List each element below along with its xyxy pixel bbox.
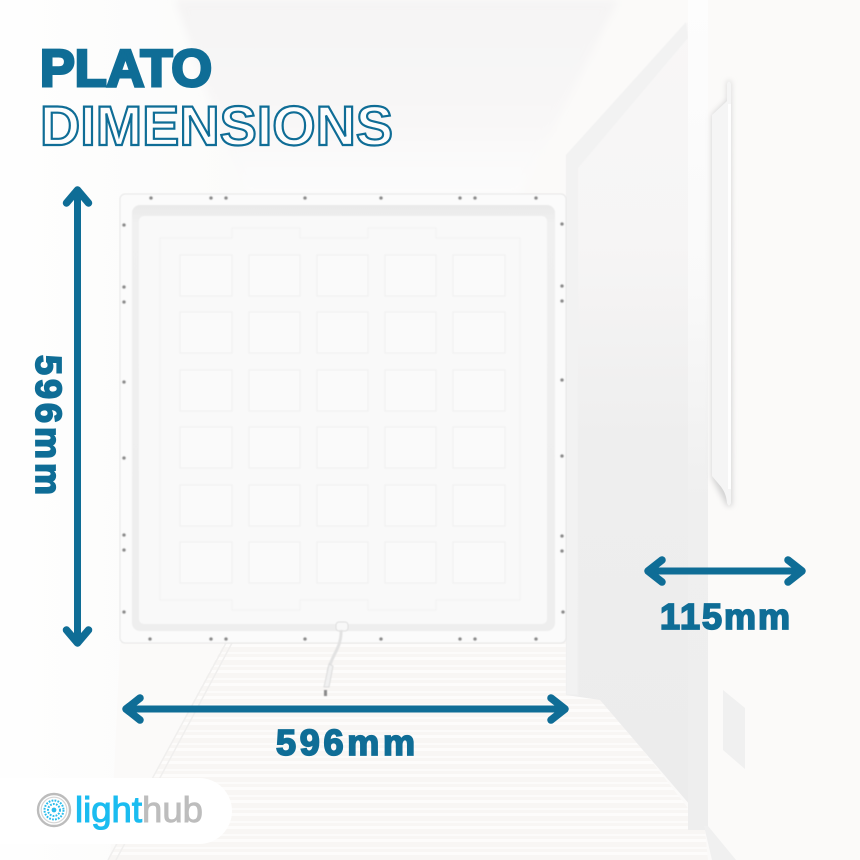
label: depth 115mm: 115mm	[660, 596, 790, 637]
power cable	[324, 622, 348, 696]
label: width 596mm: 596mm	[276, 722, 415, 763]
arrow: depth	[648, 560, 802, 582]
profile body	[712, 82, 731, 506]
arrow: horizontal width	[126, 698, 565, 720]
arrow: vertical height	[66, 190, 88, 643]
skirting	[704, 826, 736, 860]
profile highlight	[728, 104, 731, 489]
title line: PLATO: PLATO	[40, 40, 212, 98]
panel frame	[120, 194, 566, 643]
label: height 596mm: 596mm	[28, 355, 69, 495]
panel tray recess	[132, 205, 555, 631]
panel inner outline	[160, 228, 520, 610]
logo badge	[0, 778, 232, 844]
panel grid of squares	[180, 255, 505, 583]
wall light switch	[723, 690, 745, 769]
left wall	[0, 0, 245, 860]
profile shadow	[712, 81, 732, 506]
logo wordmark: lighthub	[75, 789, 203, 830]
panel flat back	[139, 216, 547, 624]
logo icon	[38, 794, 70, 826]
panel screws	[122, 196, 565, 641]
door moulding	[566, 22, 688, 695]
logo pill	[0, 778, 232, 844]
title	[40, 40, 393, 157]
floor with stripes	[108, 640, 708, 860]
door and corridor wall	[566, 0, 690, 805]
side profile of panel	[712, 81, 732, 506]
floor edge line	[108, 643, 232, 860]
panel: back of LED panel	[120, 194, 566, 696]
ceiling	[175, 0, 618, 195]
title line: DIMENSIONS outlined: DIMENSIONS	[40, 94, 393, 157]
door frame jamb	[688, 0, 708, 830]
